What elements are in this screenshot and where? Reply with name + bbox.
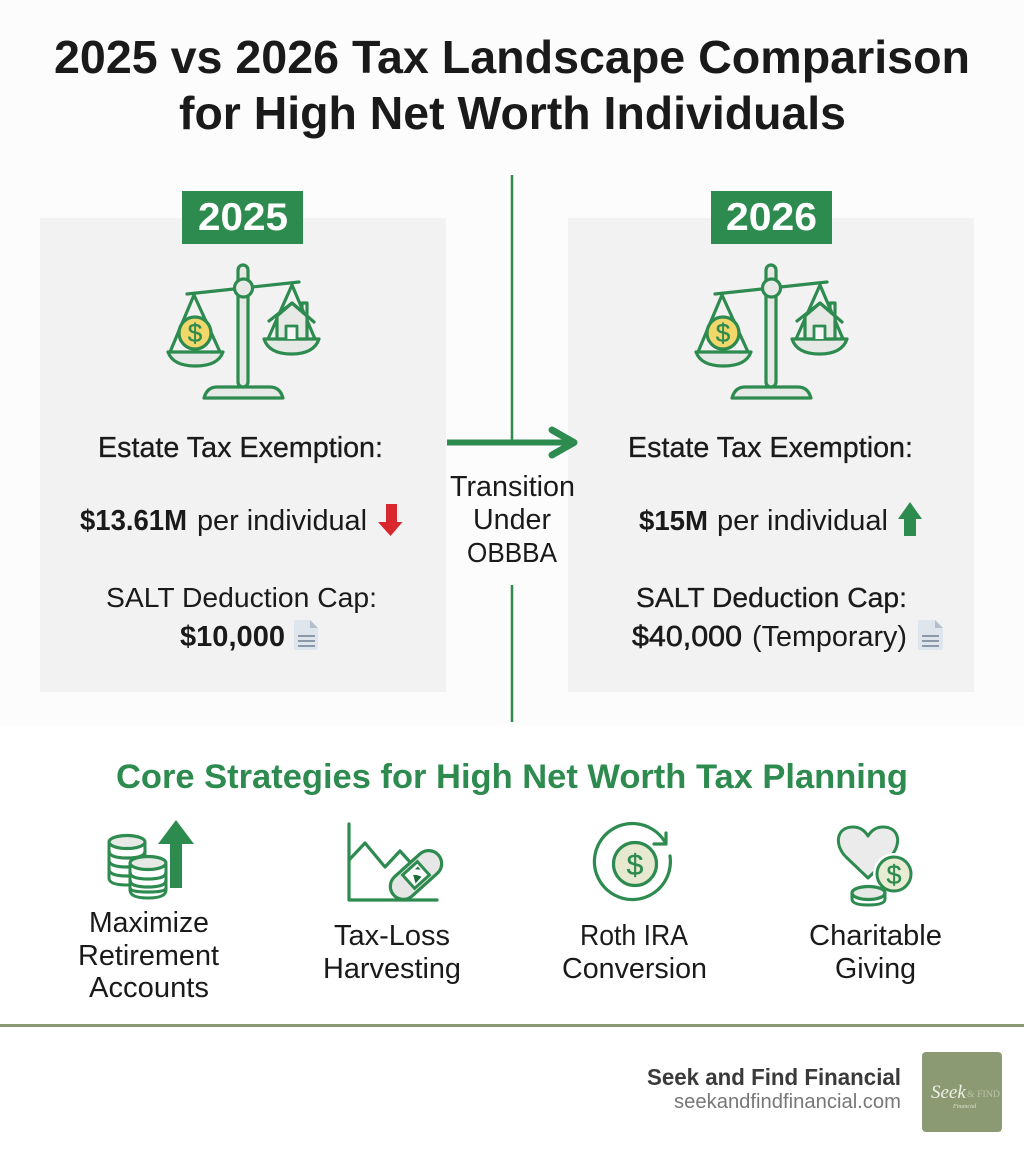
panel: 2026: [568, 191, 974, 692]
label: [323, 920, 461, 985]
footer: brand: [647, 1052, 1002, 1132]
value: 13.61M per individual: [80, 505, 367, 537]
icon: document: [294, 620, 318, 650]
label: Harvesting: [323, 953, 461, 985]
label: Accounts: [89, 972, 209, 1004]
value: 15M per individual: [639, 505, 888, 537]
icon: balance scale with coin and house: $: [188, 318, 203, 348]
brand name and URL: seekandfindfinancial.com: [674, 1091, 901, 1113]
label: estate tax exemption: Estate Tax Exemption:: [98, 432, 383, 464]
label: SALT deduction cap: SALT Deduction Cap:: [106, 582, 377, 613]
heading: core strategies: Core Strategies for High Net Worth Tax Planning: [116, 758, 908, 796]
value: 40,000 temporary: (Temporary): [752, 621, 907, 653]
icon: red down arrow: [378, 504, 402, 536]
brand name and URL: [647, 1064, 901, 1113]
logo: Seek: [931, 1082, 966, 1103]
icon: balance scale with coin and house: $: [716, 318, 731, 348]
strategy: tax-loss harvesting: [323, 824, 461, 985]
value: 13.61M per individual: per individual: [197, 505, 367, 537]
logo: & FIND: [967, 1089, 1001, 1099]
icon: balance scale with coin and house: [696, 265, 847, 398]
label: [562, 920, 707, 985]
label: Charitable: [809, 920, 942, 952]
value: 10,000: $10,000: [180, 621, 285, 653]
label: Conversion: [562, 953, 707, 985]
icon: balance scale with coin and house: [168, 265, 319, 398]
badge: 2026: [711, 191, 832, 244]
text: transition under OBBBA: Under: [473, 504, 552, 536]
value: 13.61M per individual: $13.61M: [80, 505, 187, 537]
label: estate tax exemption: Estate Tax Exemption:: [628, 432, 913, 464]
title: for High Net Worth Individuals: [179, 87, 846, 139]
label: Giving: [835, 953, 916, 985]
title: [54, 31, 970, 139]
divider: upper vertical line: [511, 175, 513, 442]
badge: 2025: [182, 191, 303, 244]
icon: circular arrow with dollar coin: [594, 824, 670, 900]
strategy: charitable giving: [809, 827, 942, 985]
strategy: maximize retirement accounts: [78, 820, 219, 1004]
label: Roth IRA: [580, 920, 688, 952]
logo: [922, 1052, 1002, 1132]
value: 15M per individual: per individual: [717, 505, 888, 537]
title: 2025 vs 2026 Tax Landscape Comparison: [54, 31, 970, 83]
label: SALT deduction cap: SALT Deduction Cap:: [636, 582, 907, 613]
value: 15M per individual: $15M: [639, 505, 708, 536]
text: transition under OBBBA: Transition: [450, 471, 575, 503]
icon: heart with coins: $: [886, 860, 902, 890]
footer rule: [0, 1024, 1024, 1027]
value: 40,000 temporary: [632, 621, 907, 653]
icon: green up arrow: [898, 502, 922, 536]
divider: lower vertical line: [511, 585, 513, 722]
label: [809, 920, 942, 985]
logo: Financial: [952, 1104, 977, 1110]
label: Maximize: [89, 907, 209, 939]
icon: document: [918, 620, 943, 650]
arrow: transition: [447, 430, 574, 455]
panel: 2025: [40, 191, 446, 692]
label: Retirement: [78, 940, 219, 972]
icon: chart with bandage: [349, 824, 447, 905]
label: [78, 907, 219, 1004]
brand name and URL: Seek and Find Financial: [647, 1064, 901, 1090]
icon: coin stacks with up arrow: [109, 820, 194, 898]
text: transition under OBBBA: OBBBA: [467, 537, 557, 568]
icon: circular arrow with dollar coin: $: [627, 849, 644, 882]
strategy: Roth IRA conversion: [562, 824, 707, 985]
badge: 2026: 2026: [726, 196, 817, 239]
text: transition under OBBBA: [450, 471, 575, 568]
label: Tax-Loss: [334, 920, 450, 952]
value: 40,000 temporary: $40,000: [632, 621, 742, 653]
badge: 2025: 2025: [198, 196, 288, 239]
icon: heart with coins: [838, 827, 915, 905]
